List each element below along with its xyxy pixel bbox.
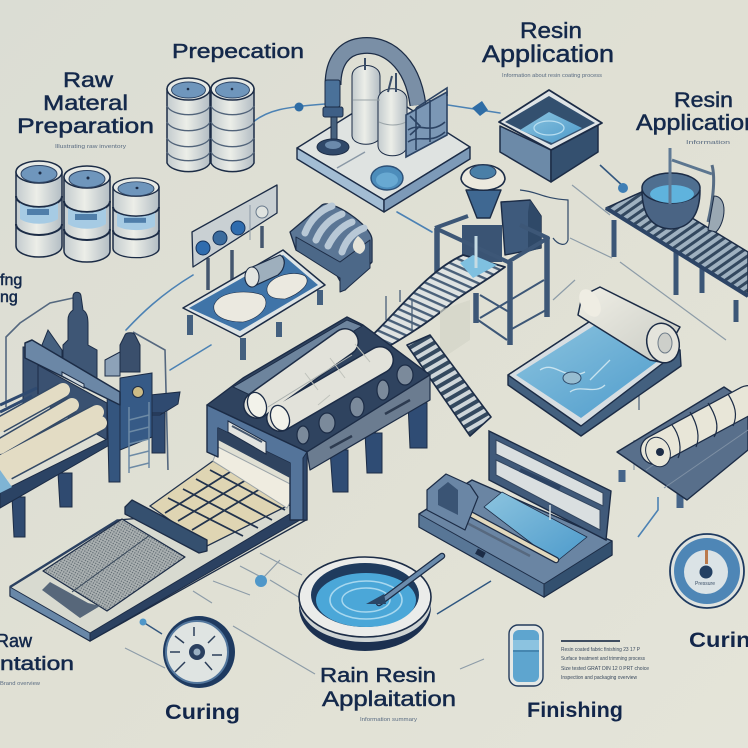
- heading: Raw Material Preparation: Raw: [63, 69, 114, 92]
- icon: right gauge: [670, 534, 744, 608]
- heading: Resin Application centre: [482, 18, 614, 79]
- table: spools on slate bench: [617, 387, 748, 508]
- tank: resin bath: [499, 90, 602, 182]
- heading: clipped left label: ng: [0, 289, 18, 306]
- stairs below conveyor: [407, 335, 491, 436]
- tray: water bath with large roll: [508, 286, 684, 436]
- label: Rain Resin Application: Information summary: [360, 717, 417, 723]
- heading: Resin Application centre: Resin: [520, 18, 582, 43]
- machine: grey rolls box: [290, 204, 372, 292]
- icon: resin bowl with spoon: [299, 556, 442, 651]
- heading: Resin Application right: Resin: [674, 89, 733, 112]
- text block: finishing notes: Size tested GRAT DIN 12 0 PRT choice: [561, 666, 649, 672]
- machine: pipe and spools: [297, 45, 470, 212]
- icon: bottom curing dial: [163, 616, 235, 688]
- machine: finishing press with water bed: [419, 431, 612, 597]
- label: Curing bottom: Curing: [165, 701, 240, 724]
- label: Finishing: Finishing: [527, 699, 623, 722]
- heading: Prepecation: Prepecation: [172, 41, 304, 63]
- drums: preparation: [167, 78, 254, 172]
- icon: right gauge: Pressure: [695, 581, 715, 587]
- heading: Resin Application right: [636, 89, 748, 146]
- label: Rain Resin Application: Rain Resin: [320, 665, 436, 687]
- connector arrows: [125, 101, 726, 674]
- heading: Resin Application right: Application: [636, 110, 748, 135]
- label: Raw Application clipped: [0, 631, 74, 687]
- station: table with fabric bales: [183, 250, 325, 360]
- machine: hopper and inclined conveyor: [362, 165, 568, 360]
- heading: Resin Application centre: Application: [482, 41, 614, 68]
- drums: raw material: [16, 161, 159, 262]
- text block: finishing notes: Inspection and packaging overview: [561, 675, 637, 681]
- belt: grid section and front frame: [10, 447, 306, 641]
- label: Rain Resin Application: [320, 665, 456, 723]
- text block: finishing notes: [561, 641, 649, 681]
- heading: Resin Application centre: Information about resin coating process: [502, 73, 602, 79]
- label: Rain Resin Application: Applaitation: [322, 688, 456, 711]
- machine: left roller press: [0, 292, 180, 537]
- text block: finishing notes: Surface treatment and trimming process: [561, 656, 645, 662]
- label: Raw Application clipped: ntation: [0, 654, 74, 675]
- heading: clipped left label: [0, 272, 22, 306]
- text block: finishing notes: Resin coated fabric finishing 23 17 P: [561, 647, 640, 653]
- icon: blue capsule: [509, 625, 543, 686]
- heading: Raw Material Preparation: [17, 69, 154, 150]
- heading: clipped left label: fng: [0, 272, 22, 289]
- panel: control board with buttons: [192, 185, 277, 290]
- machine: centre arch frame: [207, 405, 307, 520]
- heading: Raw Material Preparation: Materal: [43, 92, 128, 115]
- heading: Raw Material Preparation: Illustrating raw inventory: [55, 144, 126, 150]
- heading: Resin Application right: Information: [686, 140, 730, 146]
- heading: Raw Material Preparation: Preparation: [17, 115, 154, 138]
- machine: centre rollers and gears: [207, 317, 430, 492]
- label: Raw Application clipped: Brand overview: [0, 681, 40, 687]
- station: bowl on roller table: [606, 148, 748, 322]
